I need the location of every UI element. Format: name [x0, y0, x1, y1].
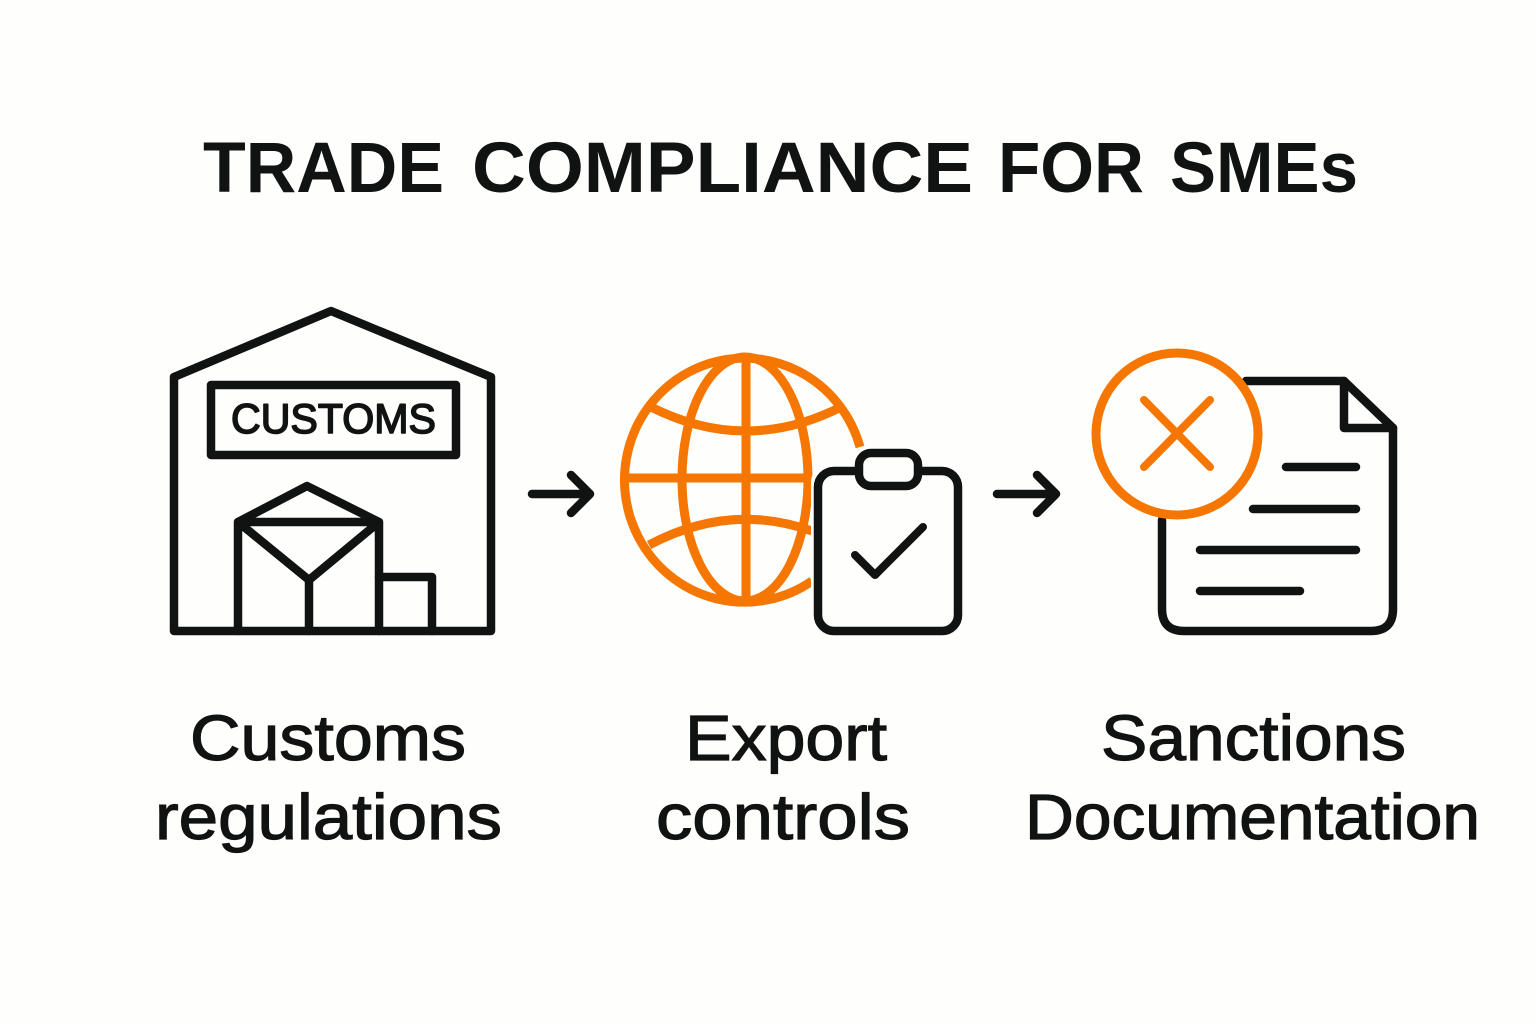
title: TRADE — [203, 129, 444, 208]
icon: customs warehouse — [174, 311, 491, 631]
label: export controls: Export — [685, 702, 887, 774]
label: customs regulations — [155, 702, 502, 853]
title: FOR — [998, 129, 1144, 208]
arrow: customs to export — [532, 475, 590, 513]
label: customs regulations: Customs — [190, 702, 466, 774]
small parcel — [379, 577, 432, 631]
globe — [625, 357, 860, 602]
title: COMPLIANCE — [472, 129, 973, 208]
icon: document with sanction mark — [1096, 353, 1393, 631]
label: export controls — [656, 702, 910, 853]
prohibited circle — [1096, 353, 1258, 515]
label: export controls: controls — [656, 781, 910, 853]
label: sanctions documentation: Sanctions — [1101, 702, 1406, 774]
document — [1162, 381, 1393, 631]
label: customs regulations: regulations — [155, 781, 502, 853]
arrow: export to sanctions — [997, 475, 1056, 513]
check mark — [855, 527, 923, 575]
customs sign: CUSTOMS — [231, 395, 436, 442]
clipboard — [811, 453, 965, 638]
title: SMEs — [1170, 129, 1358, 208]
warehouse outline — [174, 311, 491, 631]
label: sanctions documentation — [1025, 702, 1480, 853]
customs sign — [211, 385, 456, 455]
label: sanctions documentation: Documentation — [1025, 781, 1480, 853]
text lines — [1200, 467, 1356, 591]
large parcel — [238, 486, 379, 631]
icon: globe with clipboard — [625, 357, 965, 638]
